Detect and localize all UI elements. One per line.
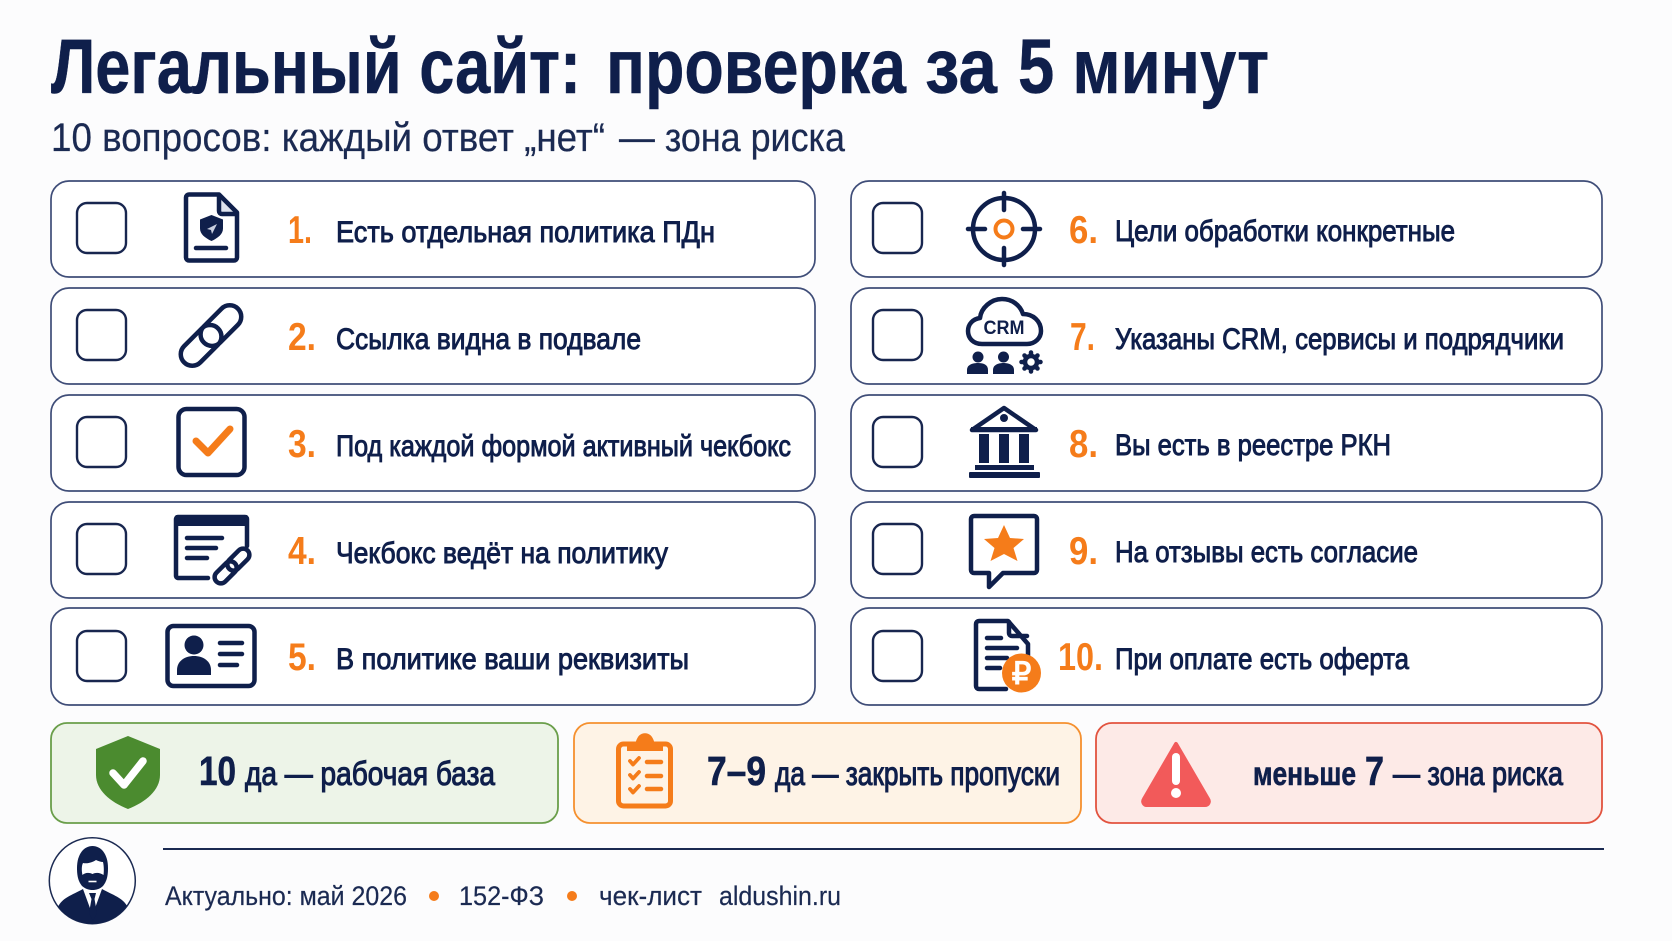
icon: document with ruble coin: [976, 621, 1041, 692]
panel: result orange: [574, 723, 1081, 823]
icon: CRM cloud with people and gear: [967, 299, 1041, 374]
checkbox: [873, 631, 922, 681]
card: [851, 395, 1602, 491]
result text: 7–9: [707, 748, 766, 794]
panel: result red: [1096, 723, 1602, 823]
icon: bank building: [969, 408, 1040, 478]
result text: да — закрыть пропуски: [775, 755, 1060, 792]
panel: question 7: [851, 288, 1602, 384]
question text: Вы есть в реестре РКН: [1115, 429, 1391, 462]
card: [51, 502, 815, 598]
checkbox: [77, 417, 126, 467]
green box: [51, 723, 558, 823]
checkbox: [873, 310, 922, 360]
icon: document with shield: [186, 194, 237, 260]
checkbox: [77, 631, 126, 681]
panel: question 2: [51, 288, 815, 384]
card: [851, 288, 1602, 384]
number: 10.: [1058, 636, 1103, 679]
title: Легальный сайт:: [51, 24, 581, 110]
avatar: man in suit: [49, 838, 135, 924]
title: проверка: [606, 24, 907, 110]
question text: Ссылка видна в подвале: [336, 323, 641, 356]
footer text: Актуально: май 2026: [165, 881, 407, 911]
footer text: [165, 881, 841, 911]
panel: question 8: [851, 395, 1602, 491]
panel: result green: [51, 723, 558, 823]
card: [51, 181, 815, 277]
question text: В политике ваши реквизиты: [336, 643, 689, 676]
question text: Указаны CRM, сервисы и подрядчики: [1115, 323, 1564, 356]
number: 6.: [1069, 209, 1098, 252]
footer text: чек-лист: [599, 881, 702, 911]
panel: question 4: [51, 502, 815, 598]
icon: id card: [168, 626, 254, 686]
result text: меньше: [1253, 755, 1356, 792]
card: [51, 608, 815, 705]
number: 1.: [288, 209, 312, 252]
icon: document with ruble coin: ₽: [1012, 656, 1032, 691]
panel: question 1: [51, 181, 815, 277]
footer text: aldushin.ru: [719, 881, 841, 911]
subtitle: 10 вопросов: каждый ответ „нет“: [51, 116, 605, 160]
icon: target: [968, 193, 1040, 265]
question text: Цели обработки конкретные: [1115, 215, 1455, 248]
icon: window with link: [175, 515, 252, 586]
subtitle: — зона риска: [619, 116, 846, 160]
result text: — зона риска: [1393, 755, 1564, 792]
number: 5.: [288, 636, 316, 679]
result text: [1253, 748, 1564, 794]
icon: warning triangle: [1143, 744, 1209, 805]
card: [51, 288, 815, 384]
title: [51, 24, 1269, 110]
checkbox: [77, 310, 126, 360]
footer text: 152-ФЗ: [459, 881, 544, 911]
card: [851, 608, 1602, 705]
result text: [199, 748, 496, 794]
title: за: [925, 24, 998, 110]
number: 9.: [1069, 530, 1098, 573]
card: [851, 502, 1602, 598]
checkbox: [873, 524, 922, 574]
icon: green shield with check: [96, 736, 160, 809]
red box: [1096, 723, 1602, 823]
title: 5 минут: [1018, 24, 1269, 110]
question text: На отзывы есть согласие: [1115, 536, 1418, 569]
question text: Чекбокс ведёт на политику: [336, 537, 668, 570]
footer rule: [163, 848, 1604, 850]
panel: question 9: [851, 502, 1602, 598]
number: 7.: [1070, 316, 1095, 359]
checkbox: [77, 524, 126, 574]
result text: 7: [1365, 748, 1384, 794]
panel: question 5: [51, 608, 815, 705]
icon: chain link: [176, 300, 246, 371]
card: [51, 395, 815, 491]
card: [851, 181, 1602, 277]
panel: question 6: [851, 181, 1602, 277]
icon: CRM cloud with people and gear: CRM: [984, 318, 1024, 339]
number: 3.: [288, 423, 316, 466]
number: 8.: [1069, 423, 1098, 466]
icon: review speech bubble: [971, 516, 1037, 587]
icon: checked box: [178, 409, 244, 475]
question text: Есть отдельная политика ПДн: [336, 216, 715, 249]
question text: При оплате есть оферта: [1115, 643, 1409, 676]
checkbox: [873, 417, 922, 467]
result text: да — рабочая база: [245, 755, 496, 792]
result text: 10: [199, 748, 236, 794]
icon: clipboard checklist: [618, 733, 670, 806]
checkbox: [77, 203, 126, 253]
number: 4.: [288, 530, 316, 573]
question text: Под каждой формой активный чекбокс: [336, 430, 791, 463]
result text: [707, 748, 1060, 794]
panel: question 3: [51, 395, 815, 491]
orange box: [574, 723, 1081, 823]
panel: question 10: [851, 608, 1602, 705]
checkbox: [873, 203, 922, 253]
number: 2.: [288, 316, 316, 359]
